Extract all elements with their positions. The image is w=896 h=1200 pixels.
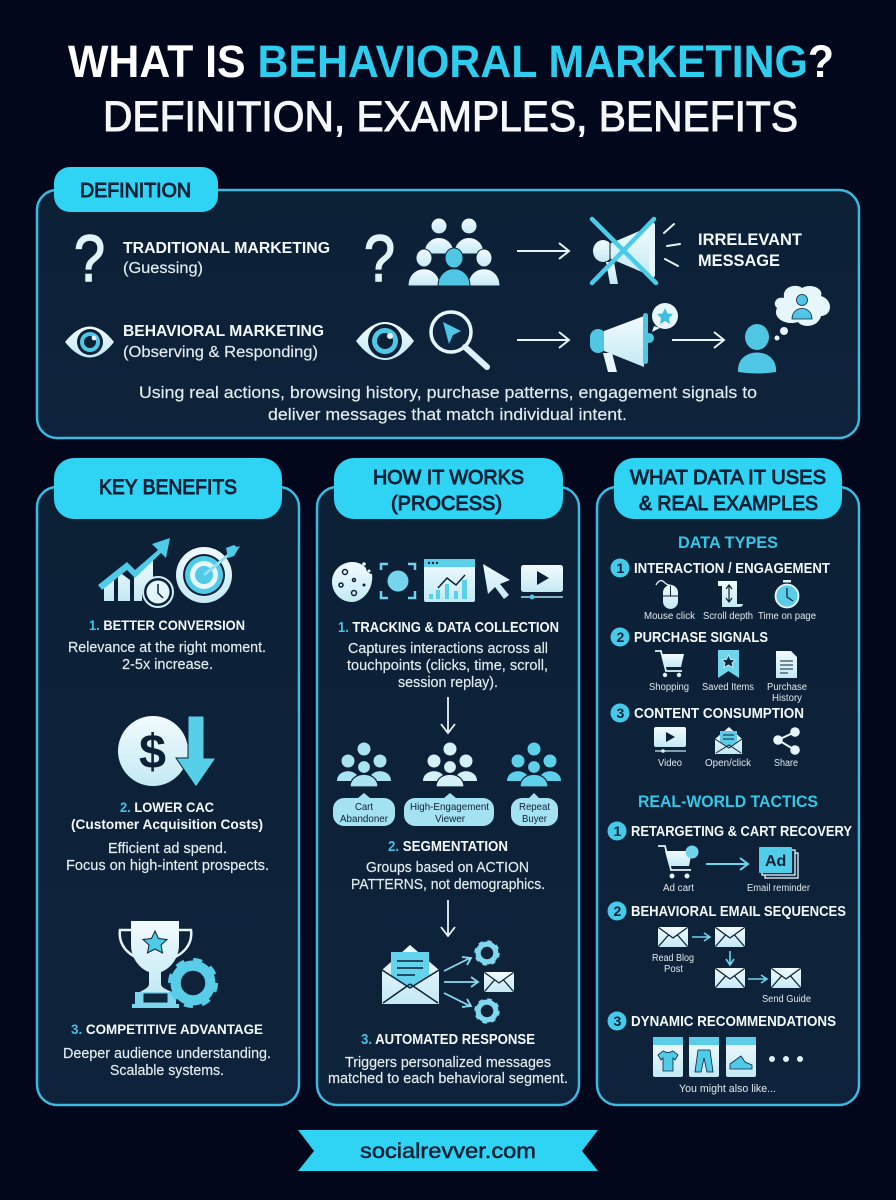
data type 1 labels: Mouse click: [644, 611, 696, 622]
icon: open envelope: [715, 727, 742, 754]
icon: growth chart and target: [98, 538, 240, 607]
tactic 1 labels: Ad cart: [663, 883, 694, 894]
benefit 1 text: 2-5x increase.: [122, 657, 213, 673]
icon: browser chart: [424, 559, 475, 602]
benefit 3 text: [63, 1046, 271, 1079]
behavioral marketing label: BEHAVIORAL MARKETING: [123, 323, 324, 340]
product recommendation cards: [653, 1037, 803, 1077]
segment: high-engagement viewer: Viewer: [435, 813, 465, 825]
segment: repeat buyer: Buyer: [522, 813, 547, 825]
tactic 1 heading: 1: [614, 823, 622, 839]
icon: timer: [776, 580, 798, 608]
icon: question mark 2: ?: [364, 221, 395, 295]
icon: ad cart: [658, 846, 698, 878]
step 2 text: [351, 860, 545, 893]
data type 2 labels: [649, 682, 807, 704]
benefit 2 heading: [71, 799, 263, 832]
icon: magnifier with cursor: [431, 312, 487, 367]
icon: shopping cart: [655, 651, 684, 677]
step 2 text: PATTERNS, not demographics.: [351, 877, 545, 893]
icon: document: [776, 651, 797, 678]
segment: cart abandoner: Abandoner: [340, 813, 388, 825]
data type 3 labels: [658, 758, 798, 769]
benefit 2 text: Efficient ad spend.: [108, 841, 227, 857]
icon: ad cards: Ad: [765, 853, 786, 870]
arrow: [517, 332, 569, 348]
arrow down: [441, 900, 455, 936]
benefit 2 heading: (Customer Acquisition Costs): [71, 816, 263, 832]
definition badge: DEFINITION: [80, 180, 191, 202]
icon: person with thought: [738, 286, 830, 374]
icon: video: [654, 727, 686, 753]
step 2 text: Groups based on ACTION: [366, 860, 529, 876]
data panel badge: [614, 458, 842, 519]
icon: audience group: [408, 218, 500, 286]
panel: what data it uses: [597, 458, 859, 1105]
data type 1 labels: [644, 611, 816, 622]
data type 1 labels: Time on page: [758, 611, 816, 622]
benefit 2 text: Focus on high-intent prospects.: [66, 858, 269, 874]
email sequence flow: [652, 927, 811, 1005]
icon: dollar coin and down arrow: $: [139, 726, 166, 779]
icon: eye 2: [356, 322, 414, 360]
tactic 3 heading: 3: [614, 1013, 622, 1029]
icon: ad cards: [759, 847, 798, 878]
data type 1 heading: 1: [616, 560, 624, 576]
data type 2 heading: 2: [616, 629, 624, 645]
footer ribbon: [298, 1130, 598, 1171]
data type 2 heading: [610, 628, 768, 646]
step 1 text: touchpoints (clicks, time, scroll,: [347, 658, 548, 674]
data type 3 labels: Open/click: [705, 758, 752, 769]
definition panel box: [37, 190, 859, 438]
segment: cart abandoner: Cart: [355, 801, 373, 813]
title: WHAT IS BEHAVIORAL MARKETING?: [68, 36, 834, 87]
footer ribbon: socialrevver.com: [360, 1139, 536, 1163]
icon: megaphone with star: [590, 303, 678, 372]
step 1 text: [347, 641, 548, 691]
you might also like caption: You might also like...: [679, 1083, 776, 1095]
data type 3 labels: Share: [774, 758, 798, 769]
traditional marketing label: [123, 240, 330, 277]
panel: how it works: [317, 458, 579, 1105]
icon: envelope with routed messages: [382, 942, 514, 1022]
benefit 2 text: [66, 841, 269, 874]
benefit 1 text: Relevance at the right moment.: [68, 640, 266, 656]
panel: key benefits: [37, 458, 299, 1105]
tactic 2 heading: BEHAVIORAL EMAIL SEQUENCES: [631, 904, 846, 920]
arrow: [672, 332, 724, 348]
icon: crossed megaphone: [592, 219, 680, 284]
arrow: [706, 858, 748, 870]
data panel badge: & REAL EXAMPLES: [639, 493, 818, 515]
definition text: [139, 383, 757, 424]
how it works badge: (PROCESS): [391, 493, 502, 515]
icon: trophy and gear: [120, 921, 215, 1008]
segment: high-engagement viewer: [404, 742, 494, 826]
traditional marketing label: TRADITIONAL MARKETING: [123, 240, 330, 257]
icon: cookie: [332, 562, 372, 602]
benefit 3 text: Scalable systems.: [110, 1063, 224, 1079]
data type 2 labels: Saved Items: [702, 682, 754, 693]
how it works box: [317, 487, 579, 1105]
data types heading: DATA TYPES: [678, 533, 778, 552]
irrelevant message label: MESSAGE: [698, 251, 780, 270]
step 3 heading: 3. AUTOMATED RESPONSE: [361, 1032, 535, 1048]
icon: question mark: ?: [74, 221, 105, 295]
icon: cursor: [483, 564, 510, 599]
key benefits badge: KEY BENEFITS: [99, 476, 237, 499]
data panel box: [597, 487, 859, 1105]
email sequence flow: Send Guide: [762, 994, 811, 1005]
definition text: deliver messages that match individual intent.: [268, 405, 627, 424]
icon: share: [773, 727, 800, 755]
title: [68, 36, 834, 141]
data type 3 heading: 3: [616, 705, 624, 721]
icon: mouse: [656, 581, 678, 609]
icon: video player: [521, 565, 563, 600]
definition badge: [54, 167, 218, 212]
real-world tactics heading: REAL-WORLD TACTICS: [638, 792, 818, 811]
step 3 text: Triggers personalized messages: [345, 1055, 551, 1071]
step 2 heading: 2. SEGMENTATION: [388, 839, 508, 855]
benefit 3 text: Deeper audience understanding.: [63, 1046, 271, 1062]
how it works badge: HOW IT WORKS: [373, 467, 524, 489]
tactic 1 labels: [663, 883, 811, 894]
tactic 3 heading: DYNAMIC RECOMMENDATIONS: [631, 1014, 836, 1030]
key benefits badge: [54, 458, 282, 519]
definition text: Using real actions, browsing history, purchase patterns, engagement signals to: [139, 383, 757, 402]
segment: cart abandoner: [333, 742, 395, 826]
benefit 1 heading: 1. BETTER CONVERSION: [89, 617, 245, 633]
segment: repeat buyer: [507, 742, 561, 826]
data type 2 labels: History: [772, 693, 802, 704]
icon: dollar coin and down arrow: [118, 716, 216, 787]
tactic 1 heading: RETARGETING & CART RECOVERY: [631, 824, 852, 840]
arrow down: [441, 697, 455, 733]
data panel badge: WHAT DATA IT USES: [630, 467, 826, 489]
segment: repeat buyer: Repeat: [519, 801, 550, 813]
irrelevant message label: [698, 230, 803, 270]
data type 3 heading: CONTENT CONSUMPTION: [634, 706, 804, 722]
how it works badge: [334, 458, 563, 519]
data type 2 labels: Shopping: [649, 682, 689, 693]
data type 2 heading: PURCHASE SIGNALS: [634, 630, 768, 646]
benefit 1 text: [68, 640, 266, 673]
tactic 2 heading: 2: [614, 903, 622, 919]
icon: focus scan: [381, 564, 415, 598]
icon: scroll depth: [718, 581, 743, 607]
behavioral marketing label: (Observing & Responding): [123, 344, 318, 361]
icon: eye: [65, 326, 114, 358]
benefit 2 heading: 2. LOWER CAC: [120, 799, 214, 815]
benefit 3 heading: 3. COMPETITIVE ADVANTAGE: [71, 1021, 263, 1037]
step 3 text: matched to each behavioral segment.: [328, 1071, 568, 1087]
data type 2 labels: Purchase: [767, 682, 807, 693]
segment: high-engagement viewer: High-Engagement: [410, 801, 489, 813]
title: DEFINITION, EXAMPLES, BENEFITS: [103, 93, 798, 141]
arrow: [517, 243, 569, 259]
step 1 text: Captures interactions across all: [348, 641, 548, 657]
traditional marketing label: (Guessing): [123, 260, 203, 277]
tactic 1 labels: Email reminder: [747, 883, 811, 894]
irrelevant message label: IRRELEVANT: [698, 230, 803, 249]
panel: definition: [37, 167, 859, 438]
data type 1 labels: Scroll depth: [703, 611, 753, 622]
tactic 1 heading: [608, 822, 852, 840]
data type 3 labels: Video: [658, 758, 682, 769]
step 3 text: [328, 1055, 568, 1087]
step 1 heading: 1. TRACKING & DATA COLLECTION: [338, 620, 559, 636]
email sequence flow: Read Blog: [652, 953, 694, 964]
icon: bookmark star: [718, 650, 739, 678]
key benefits box: [37, 487, 299, 1105]
email sequence flow: Post: [664, 964, 683, 975]
data type 1 heading: INTERACTION / ENGAGEMENT: [634, 561, 830, 577]
behavioral marketing label: [123, 323, 324, 361]
step 1 text: session replay).: [398, 675, 498, 691]
